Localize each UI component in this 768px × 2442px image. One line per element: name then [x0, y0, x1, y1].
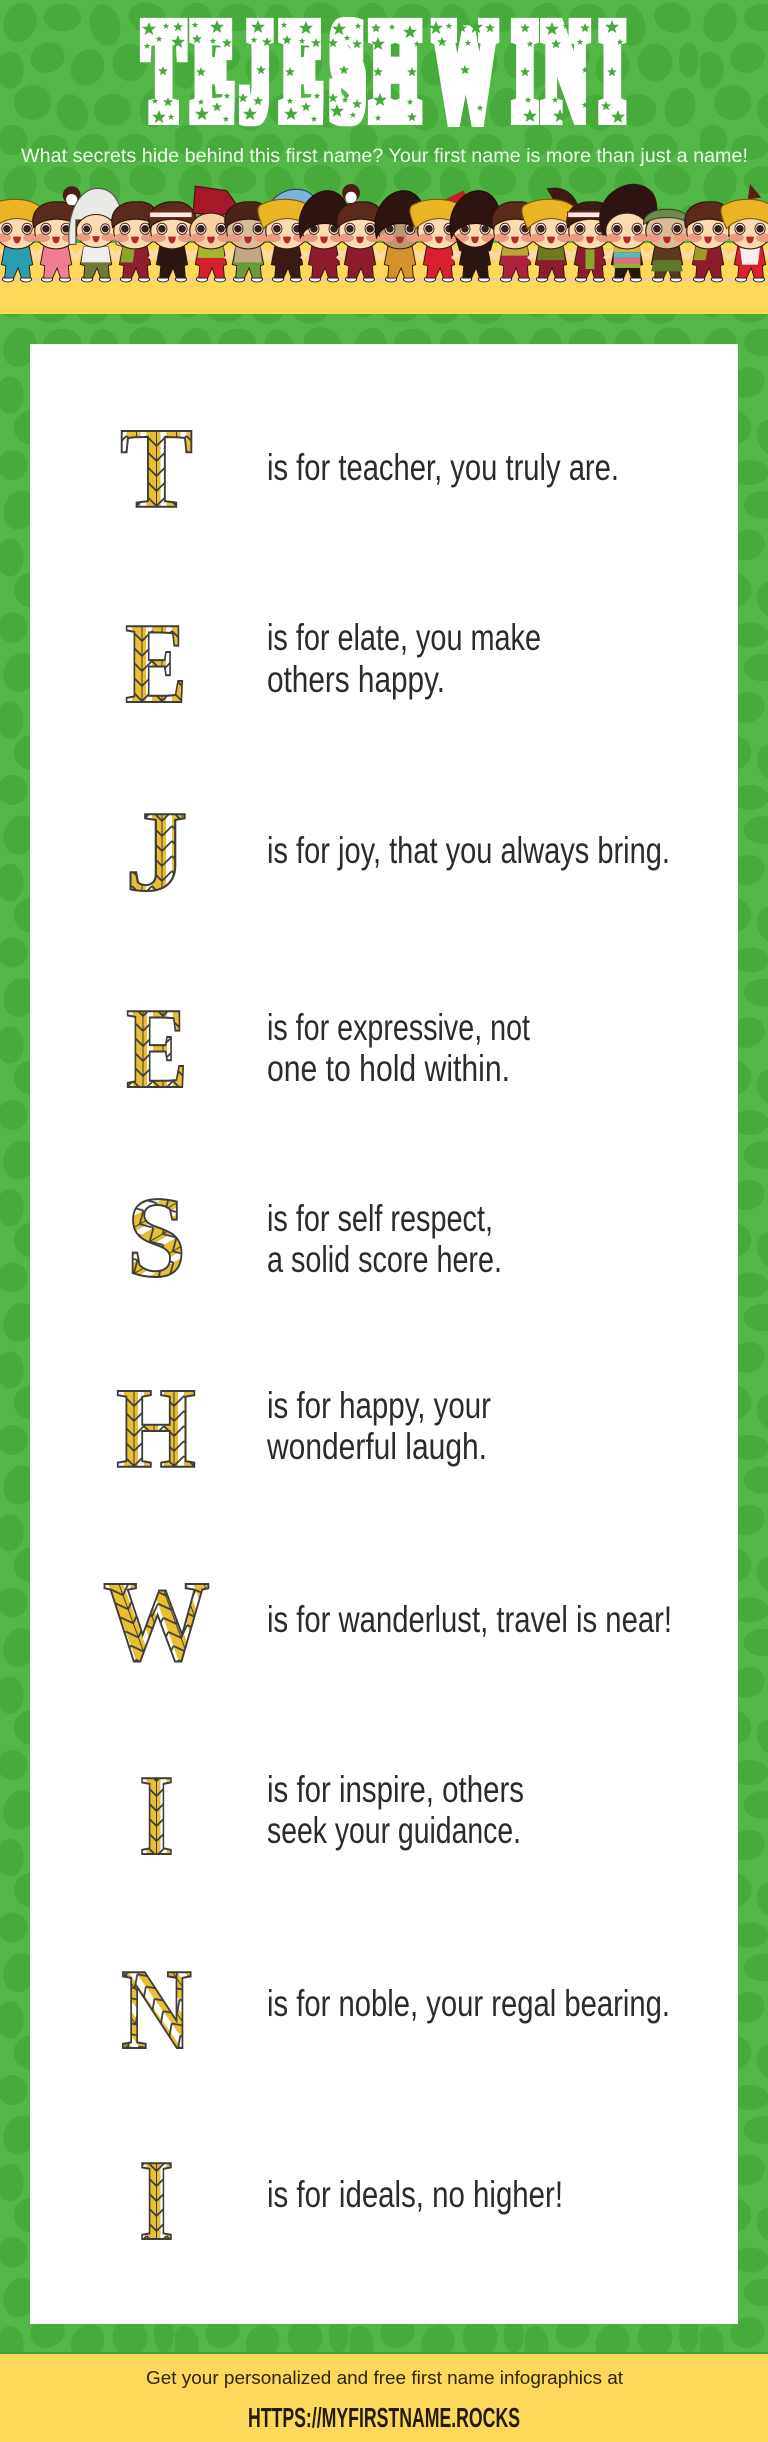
row: E	[125, 600, 541, 727]
row: N: N	[121, 1946, 192, 2073]
row: E: E	[125, 600, 187, 727]
row: I: is for inspire, others	[267, 1769, 524, 1810]
row: E: is for elate, you make	[267, 617, 541, 658]
row: H: wonderful laugh.	[266, 1426, 487, 1467]
row: I	[139, 1752, 524, 1879]
row: I: is for ideals, no higher!	[267, 2174, 563, 2215]
row: N: is for noble, your regal bearing.	[267, 1983, 670, 2024]
row: E	[126, 985, 531, 1112]
row: T: is for teacher, you truly are.	[267, 447, 619, 488]
row: E: is for expressive, not	[267, 1007, 531, 1048]
row: I: I	[139, 1752, 174, 1879]
row: I	[139, 2137, 563, 2264]
row: T: T	[120, 405, 193, 532]
row: J: J	[125, 788, 188, 915]
row: W: is for wanderlust, travel is near!	[267, 1599, 672, 1640]
row: N	[121, 1946, 670, 2073]
row: J: is for joy, that you always bring.	[267, 830, 670, 871]
footer text: Get your personalized and free first name infographics at	[146, 2367, 623, 2388]
row: H	[116, 1365, 491, 1492]
row: I: seek your guidance.	[267, 1810, 521, 1851]
subtitle: What secrets hide behind this first name? Your first name is more than just a name!	[21, 145, 748, 167]
header band: yellow strip	[0, 243, 768, 314]
row: H: H	[116, 1365, 196, 1492]
row: S: is for self respect,	[267, 1198, 493, 1239]
row: W: W	[103, 1558, 210, 1685]
row: E: one to hold within.	[267, 1048, 510, 1089]
row: T	[120, 405, 619, 532]
row: S: a solid score here.	[267, 1239, 502, 1280]
row: J	[125, 788, 670, 915]
footer url: HTTPS://MYFIRSTNAME.ROCKS	[248, 2402, 520, 2433]
row: E: others happy.	[267, 659, 445, 700]
row: E: E	[126, 985, 188, 1112]
title: TEJESHWINI	[143, 0, 625, 144]
row: S	[127, 1174, 502, 1301]
row: I: I	[139, 2137, 174, 2264]
row: S: S	[127, 1174, 186, 1301]
row: W	[103, 1558, 672, 1685]
illustration: row of children	[0, 184, 768, 282]
footer	[0, 2352, 768, 2442]
title stars	[142, 20, 625, 123]
panel: letters	[30, 344, 738, 2324]
row: H: is for happy, your	[267, 1385, 491, 1426]
